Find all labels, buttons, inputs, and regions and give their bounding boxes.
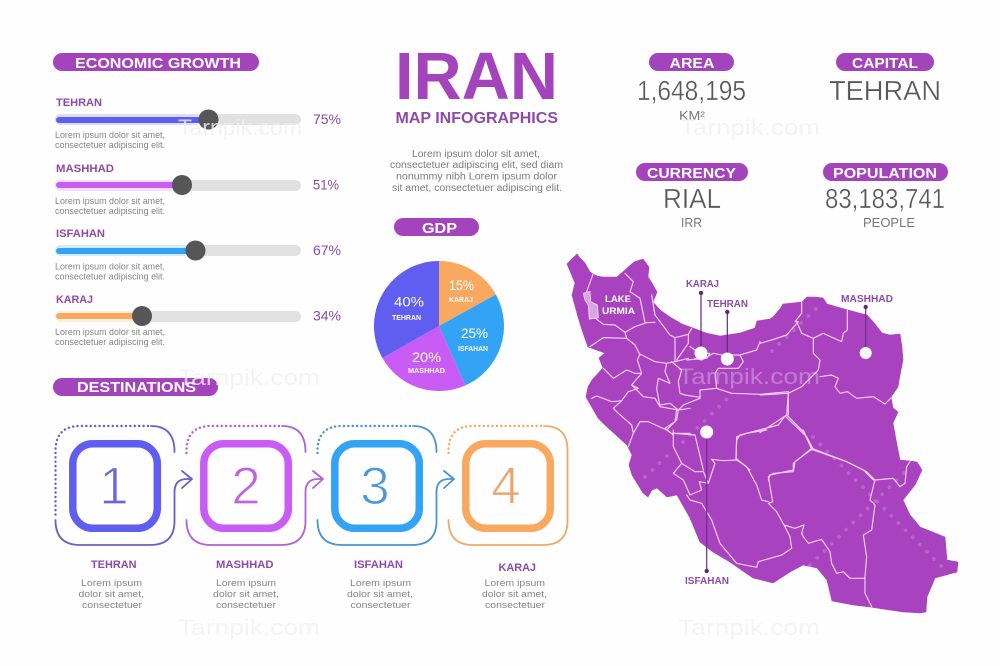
- step 4: Karaj: dolor sit amet,: [482, 589, 547, 599]
- slider: Mashhad 51%: MASHHAD: [56, 163, 114, 175]
- slider: Karaj 34%: 34%: [313, 308, 341, 324]
- pie chart: GDP: 15%: [449, 277, 474, 293]
- map marker: Mashhad: [841, 294, 893, 359]
- stat: capital: [829, 53, 941, 106]
- slider: Mashhad 51%: Lorem ipsum dolor sit amet,: [55, 196, 165, 206]
- map marker: Isfahan: ISFAHAN: [685, 576, 729, 587]
- map marker: Karaj: KARAJ: [686, 279, 719, 290]
- slider: Karaj 34%: [55, 294, 341, 347]
- step 4: Karaj: consectetuer: [485, 600, 545, 610]
- heading pill: destinations: [53, 378, 218, 396]
- pie chart: GDP: KARAJ: [449, 297, 473, 304]
- stat: area: AREA: [670, 55, 715, 72]
- slider: Tehran 75%: 75%: [313, 111, 341, 127]
- step 4: Karaj: 4: [491, 457, 521, 516]
- step 4: Karaj: KARAJ: [498, 562, 536, 574]
- watermark text: Tarnpik.com: [178, 365, 320, 390]
- stat: area: 1,648,195: [637, 75, 746, 106]
- step 1: Tehran: consectetuer: [82, 600, 142, 610]
- heading pill: GDP: [394, 218, 479, 237]
- step 1: Tehran: TEHRAN: [91, 559, 137, 571]
- step 1: Tehran: 1: [99, 457, 129, 516]
- panel: economic growth sliders: [55, 97, 341, 347]
- step 3: Isfahan: Lorem ipsum: [350, 578, 411, 588]
- pie chart: GDP: 20%: [412, 349, 441, 365]
- text block: intro paragraph: Lorem ipsum dolor sit amet,: [412, 149, 540, 160]
- map marker: Isfahan: [685, 426, 729, 587]
- slider: Isfahan 67%: consectetuer adipiscing elit.: [55, 272, 165, 282]
- pie chart: GDP: ISFAHAN: [458, 346, 488, 353]
- step 1: Tehran: [56, 426, 192, 610]
- map marker: Mashhad: MASHHAD: [841, 294, 893, 305]
- watermark text: [178, 115, 820, 640]
- slider: Isfahan 67%: [55, 228, 341, 282]
- slider: Karaj 34%: consectetuer adipiscing elit.: [55, 337, 165, 347]
- step 2: Mashhad: 2: [231, 457, 261, 516]
- watermark text: Tarnpik.com: [678, 364, 820, 389]
- step 4: Karaj: [448, 426, 568, 610]
- stat: currency: RIAL: [663, 183, 721, 214]
- heading pill: destinations: DESTINATIONS: [77, 379, 196, 396]
- stat: currency: IRR: [681, 215, 702, 230]
- watermark dots: [645, 308, 947, 572]
- slider: Isfahan 67%: ISFAHAN: [56, 228, 105, 240]
- stat: population: POPULATION: [833, 165, 937, 182]
- text block: intro paragraph: sit amet, consectetuer adipiscing elit.: [392, 183, 562, 194]
- step 2: Mashhad: dolor sit amet,: [213, 589, 279, 599]
- watermark text: Tarnpik.com: [178, 615, 320, 640]
- lake Urmia: LAKE: [605, 294, 631, 305]
- province borders: [587, 273, 910, 607]
- step 3: Isfahan: consectetuer: [350, 600, 411, 610]
- pie chart: GDP: 25%: [461, 325, 488, 341]
- step 3: Isfahan: dolor sit amet,: [347, 589, 413, 599]
- stat: area: KM²: [679, 108, 706, 123]
- stat: currency: [636, 163, 748, 230]
- text block: intro paragraph: consectetuer adipiscing elit, sed diam: [390, 160, 563, 171]
- slider: Tehran 75%: [55, 97, 341, 150]
- heading pill: GDP: GDP: [422, 220, 457, 237]
- step 3: Isfahan: ISFAHAN: [354, 559, 403, 571]
- step 2: Mashhad: MASHHAD: [216, 559, 274, 571]
- slider: Tehran 75%: TEHRAN: [56, 97, 102, 109]
- step 2: Mashhad: Lorem ipsum: [216, 578, 276, 588]
- stat: capital: TEHRAN: [829, 75, 941, 106]
- step 1: Tehran: Lorem ipsum: [81, 578, 142, 588]
- lake Urmia: [583, 292, 635, 319]
- lake Urmia: URMIA: [602, 306, 635, 317]
- subtitle: map infographics: MAP INFOGRAPHICS: [396, 110, 558, 127]
- map marker: Karaj: [686, 279, 719, 360]
- step 2: Mashhad: consectetuer: [216, 600, 276, 610]
- map marker: Tehran: TEHRAN: [707, 299, 748, 310]
- map of Iran: [567, 254, 958, 613]
- stat: population: [823, 163, 948, 230]
- title: IRAN: IRAN: [395, 39, 558, 114]
- map silhouette: [567, 254, 958, 613]
- step 1: Tehran: dolor sit amet,: [78, 589, 144, 599]
- map marker: Tehran: [707, 299, 748, 366]
- text block: intro paragraph: nonummy nibh Lorem ipsum dolor: [396, 172, 558, 182]
- slider: Isfahan 67%: Lorem ipsum dolor sit amet,: [55, 262, 165, 272]
- panel: destination flow: [56, 426, 568, 610]
- stat: currency: CURRENCY: [647, 165, 736, 182]
- heading pill: economic growth: ECONOMIC GROWTH: [75, 55, 241, 72]
- slider: Tehran 75%: Lorem ipsum dolor sit amet,: [55, 130, 165, 140]
- slider: Mashhad 51%: [55, 163, 339, 216]
- step 4: Karaj: Lorem ipsum: [484, 578, 545, 588]
- slider: Isfahan 67%: 67%: [313, 242, 341, 258]
- pie chart: GDP: TEHRAN: [392, 315, 421, 322]
- slider: Mashhad 51%: 51%: [313, 176, 339, 192]
- pie chart: GDP: 40%: [394, 294, 424, 310]
- watermark text: Tarnpik.com: [678, 615, 820, 640]
- step 2: Mashhad: [186, 426, 323, 610]
- slider: Karaj 34%: Lorem ipsum dolor sit amet,: [55, 327, 165, 337]
- stat: area: [637, 53, 746, 123]
- slider: Karaj 34%: KARAJ: [56, 294, 93, 306]
- slider: Mashhad 51%: consectetuer adipiscing elit.: [55, 206, 165, 216]
- slider: Tehran 75%: consectetuer adipiscing elit.: [55, 140, 165, 150]
- heading pill: economic growth: [53, 53, 259, 72]
- stat: population: 83,183,741: [825, 183, 945, 214]
- watermark text: Tarnpik.com: [680, 115, 820, 140]
- step 3: Isfahan: 3: [360, 457, 390, 516]
- text block: intro paragraph: [390, 149, 563, 194]
- pie chart: GDP: [374, 261, 504, 391]
- step 3: Isfahan: [318, 426, 454, 610]
- watermark text: Tarnpik.com: [178, 115, 302, 140]
- stat: capital: CAPITAL: [852, 55, 918, 72]
- stat: population: PEOPLE: [863, 215, 915, 230]
- pie chart: GDP: MASHHAD: [408, 368, 445, 375]
